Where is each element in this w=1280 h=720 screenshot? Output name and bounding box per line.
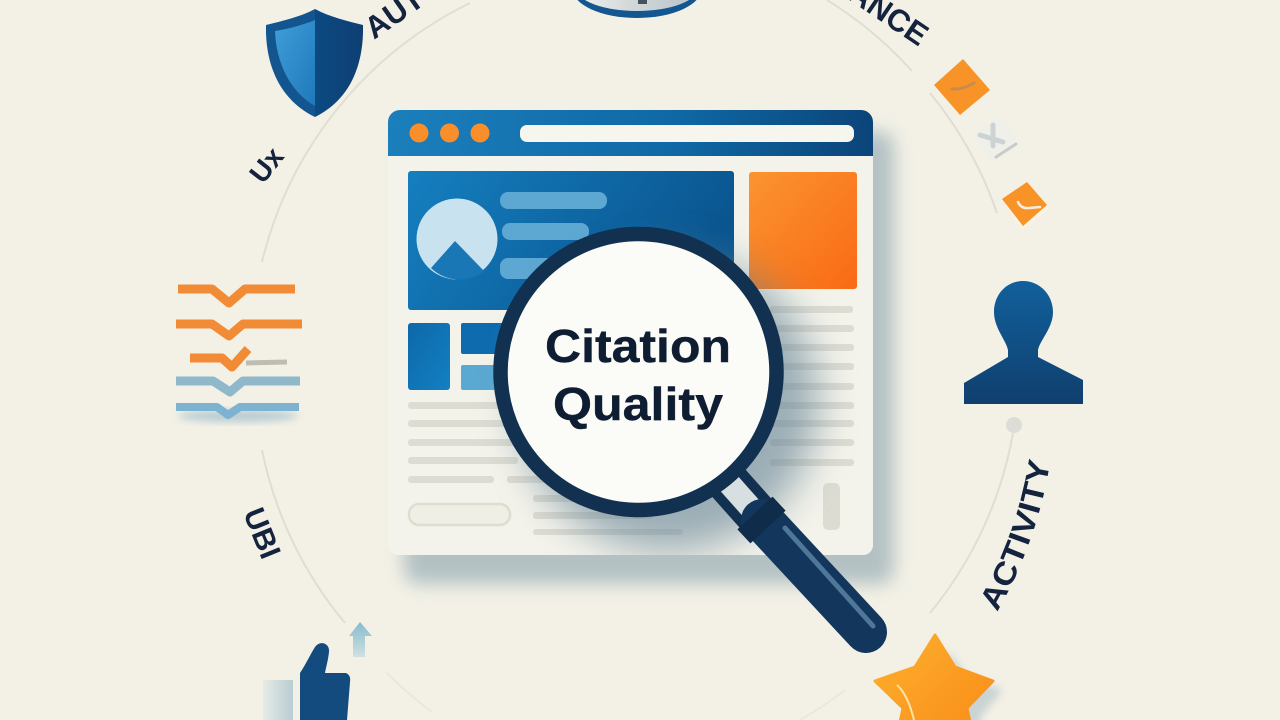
icon: up arrow <box>349 622 372 657</box>
icon: checklist <box>176 289 302 422</box>
hero panel <box>408 171 734 310</box>
lens title <box>545 320 731 430</box>
icon: orange check badge bottom <box>1002 182 1049 230</box>
lens title: Citation <box>545 320 731 372</box>
icon: orange check badge top <box>934 59 990 115</box>
small blue tiles <box>408 323 511 390</box>
pill button outline <box>409 504 510 525</box>
magnifier shadow <box>518 252 818 552</box>
icon: star <box>875 635 1003 720</box>
infographic: citation quality: ACTIVITY <box>983 458 1049 612</box>
magnifying glass <box>500 234 873 632</box>
label: ACTIVITY <box>997 456 1051 612</box>
label: UBI: UBI <box>237 503 286 564</box>
browser header bar <box>388 110 873 156</box>
page text lines <box>408 306 854 535</box>
orbit ring <box>262 0 1013 720</box>
orange panel <box>749 172 857 289</box>
icon: shield <box>266 9 363 117</box>
lens <box>500 234 776 510</box>
infographic: citation quality <box>176 0 1083 720</box>
label: Ux: Ux <box>243 141 290 189</box>
icon: person <box>964 281 1083 433</box>
icon: grey cross <box>972 115 1018 161</box>
icon: thumbs up <box>263 643 350 720</box>
lens title: Quality <box>553 378 723 430</box>
browser window <box>388 110 894 584</box>
handle <box>726 480 873 632</box>
node dot <box>1006 417 1022 433</box>
icon: database disc cropped at top <box>572 0 702 18</box>
